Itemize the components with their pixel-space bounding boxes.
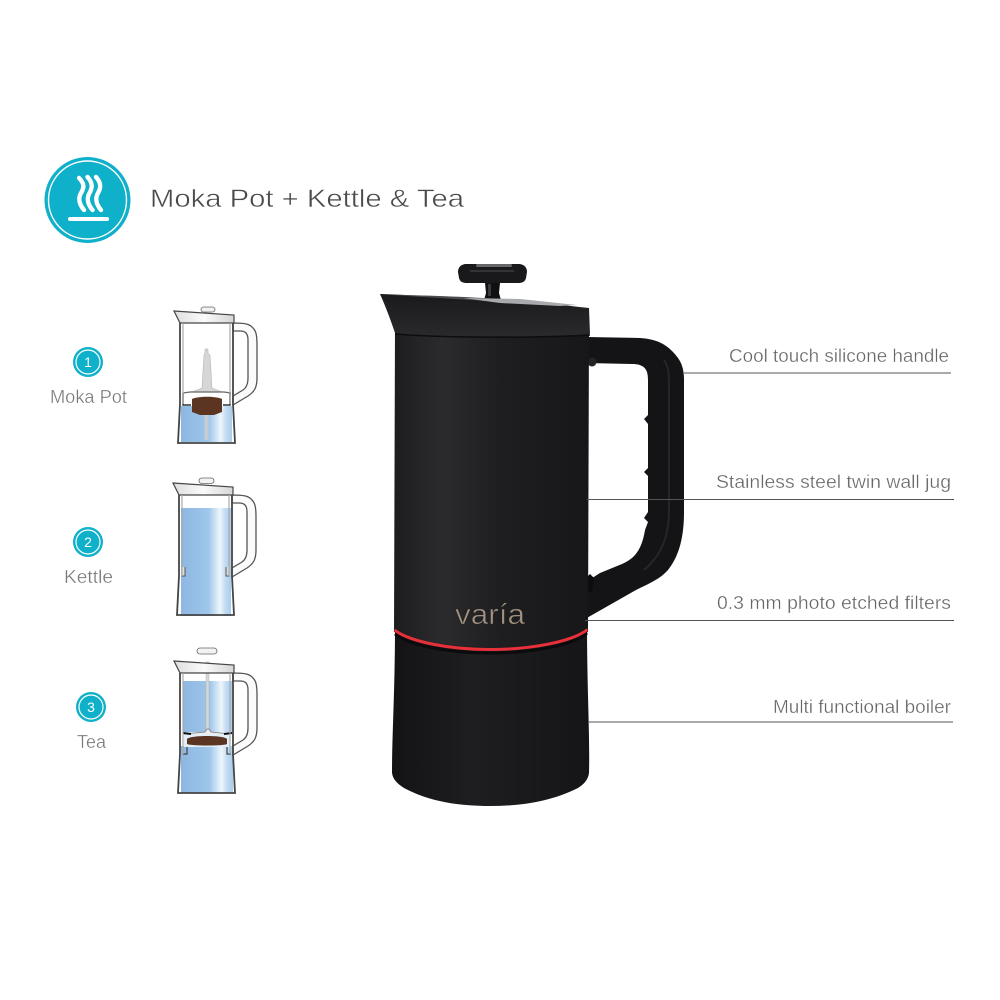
title: Moka Pot + Kettle & Tea [150, 185, 464, 213]
step 3 label: Tea [77, 732, 107, 752]
diagram: moka pot mode [174, 307, 257, 443]
step 1 badge: 1 [84, 354, 92, 370]
pitcher: brand: varía [455, 599, 526, 631]
diagram: kettle mode [173, 478, 256, 616]
step 1 label: Moka Pot [50, 387, 127, 407]
step 2 badge [73, 527, 103, 557]
pitcher: lid [380, 294, 590, 337]
diagram: tea mode [174, 648, 257, 793]
pitcher: handle [585, 337, 684, 619]
pitcher: boiler [392, 625, 589, 806]
step 3 badge: 3 [87, 699, 95, 715]
pitcher: red ring [394, 630, 588, 653]
callout: filters: 0.3 mm photo etched filters [717, 593, 951, 613]
step 1 badge [73, 347, 103, 377]
pitcher product photo [380, 264, 684, 806]
callout: handle: Cool touch silicone handle [729, 346, 949, 366]
icon: steam over heat [44, 157, 130, 243]
step 3 badge [76, 692, 106, 722]
callout: jug: Stainless steel twin wall jug [716, 472, 951, 492]
pitcher: body [394, 325, 589, 647]
step 2 badge: 2 [84, 534, 92, 550]
step 2 label: Kettle [64, 567, 113, 587]
pitcher: knob [458, 264, 527, 300]
callout: boiler: Multi functional boiler [773, 697, 951, 717]
